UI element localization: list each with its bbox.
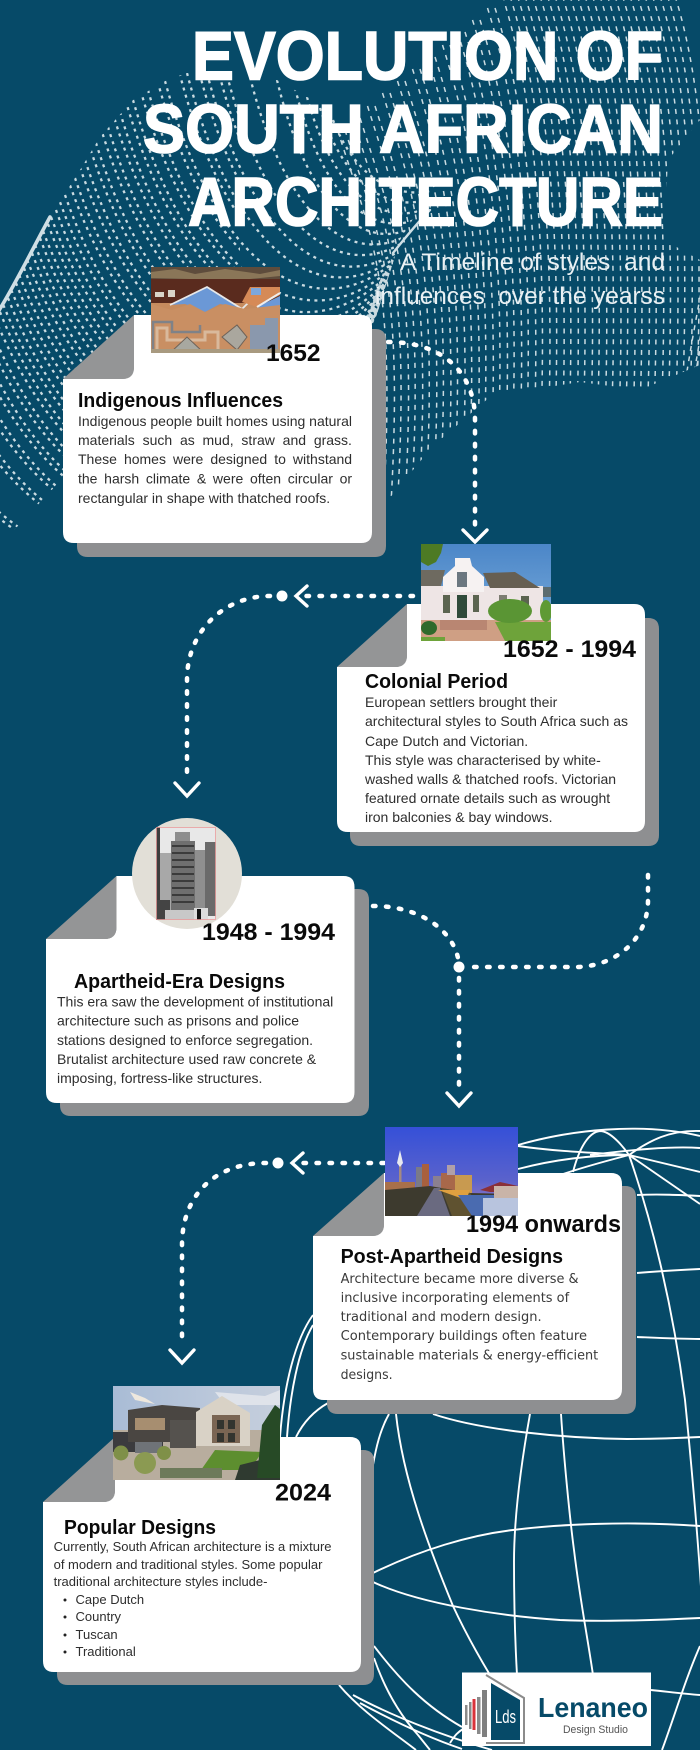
icon: house mark: Lds <box>495 1707 516 1727</box>
heading: Popular Designs <box>64 1517 216 1539</box>
logo: Lenaneo Design Studio <box>462 1672 651 1746</box>
body text: rectangular in shape with thatched roofs. <box>78 490 330 506</box>
panel: popular designs <box>43 1386 374 1685</box>
title: SOUTH AFRICAN <box>143 90 663 168</box>
body text <box>364 694 628 825</box>
panel: apartheid-era designs <box>46 818 369 1116</box>
body text: traditional and modern design. <box>341 1309 542 1325</box>
body text: designs. <box>341 1367 393 1383</box>
logo wordmark: Lenaneo <box>538 1692 648 1723</box>
body text: This style was characterised by white- <box>365 752 601 768</box>
body text <box>57 994 333 1086</box>
arrow: post-apartheid to popular <box>170 1153 384 1363</box>
body text: of modern and traditional styles. Some popular <box>54 1557 323 1572</box>
image: johannesburg skyline <box>385 1127 518 1216</box>
body text: European settlers brought their <box>365 694 558 710</box>
body text: the harsh climate & were often circular or <box>78 470 352 486</box>
body text <box>341 1271 598 1383</box>
body text: These homes were designed to withstand <box>78 451 352 467</box>
image: decorated mud wall <box>151 267 280 353</box>
body text: Cape Dutch and Victorian. <box>365 733 528 749</box>
panel: post-apartheid designs <box>313 1127 636 1414</box>
year: 2024 <box>275 1480 332 1506</box>
body text: materials such as mud, straw and grass. <box>78 432 352 448</box>
style list: Traditional <box>76 1644 136 1659</box>
subtitle: influences over the yearss <box>375 283 665 310</box>
panel: indigenous influences <box>63 267 386 557</box>
body text: iron balconies & bay windows. <box>365 809 553 825</box>
heading: Post-Apartheid Designs <box>341 1246 563 1268</box>
body text: Indigenous people built homes using natural <box>78 413 352 429</box>
heading: Apartheid-Era Designs <box>74 971 285 993</box>
body text: sustainable materials & energy-efficient <box>341 1348 598 1364</box>
arrow: apartheid and colonial to post-apartheid <box>373 875 648 1106</box>
panel: colonial period <box>337 544 659 846</box>
body text: Contemporary buildings often feature <box>341 1328 587 1344</box>
style list: Tuscan <box>76 1627 118 1642</box>
arrow: indigenous to colonial <box>388 342 487 542</box>
dotted wave background pattern <box>0 0 700 530</box>
title: EVOLUTION OF <box>192 18 663 94</box>
body text: Currently, South African architecture is a mixture <box>54 1539 332 1554</box>
heading: Indigenous Influences <box>78 390 283 412</box>
body text: Brutalist architecture used raw concrete & <box>57 1051 317 1067</box>
image: modern house render <box>113 1386 280 1480</box>
style list <box>64 1592 144 1659</box>
arrow: colonial to apartheid <box>175 586 413 796</box>
body text: washed walls & thatched roofs. Victorian <box>364 771 616 787</box>
body text: inclusive incorporating elements of <box>341 1290 570 1306</box>
body text: Architecture became more diverse & <box>341 1271 579 1287</box>
body text: stations designed to enforce segregation. <box>57 1032 313 1048</box>
image: cape dutch homestead <box>421 544 552 641</box>
body text <box>78 413 352 506</box>
subtitle <box>375 249 665 310</box>
year: 1652 <box>266 340 320 367</box>
globe line art <box>280 1129 700 1750</box>
style list: Country <box>76 1609 122 1624</box>
wave bright ridges <box>0 210 430 312</box>
logo tagline: Design Studio <box>563 1724 628 1736</box>
subtitle: A Timeline of styles and <box>400 249 665 276</box>
image: brutalist tower in circle <box>132 818 242 929</box>
year: 1994 onwards <box>466 1211 621 1238</box>
heading: Colonial Period <box>365 671 508 693</box>
year: 1948 - 1994 <box>202 919 336 946</box>
title <box>143 18 663 240</box>
body text <box>54 1539 332 1589</box>
body text: traditional architecture styles include- <box>54 1574 267 1589</box>
body text: architecture such as prisons and police <box>57 1013 299 1029</box>
body text: imposing, fortress-like structures. <box>57 1070 262 1086</box>
body text: This era saw the development of institutional <box>57 994 333 1010</box>
icon: house mark <box>465 1675 524 1743</box>
body text: architectural styles to South Africa such as <box>365 713 628 729</box>
style list: Cape Dutch <box>76 1592 144 1607</box>
body text: featured ornate details such as wrought <box>365 790 610 806</box>
year: 1652 - 1994 <box>503 636 637 663</box>
